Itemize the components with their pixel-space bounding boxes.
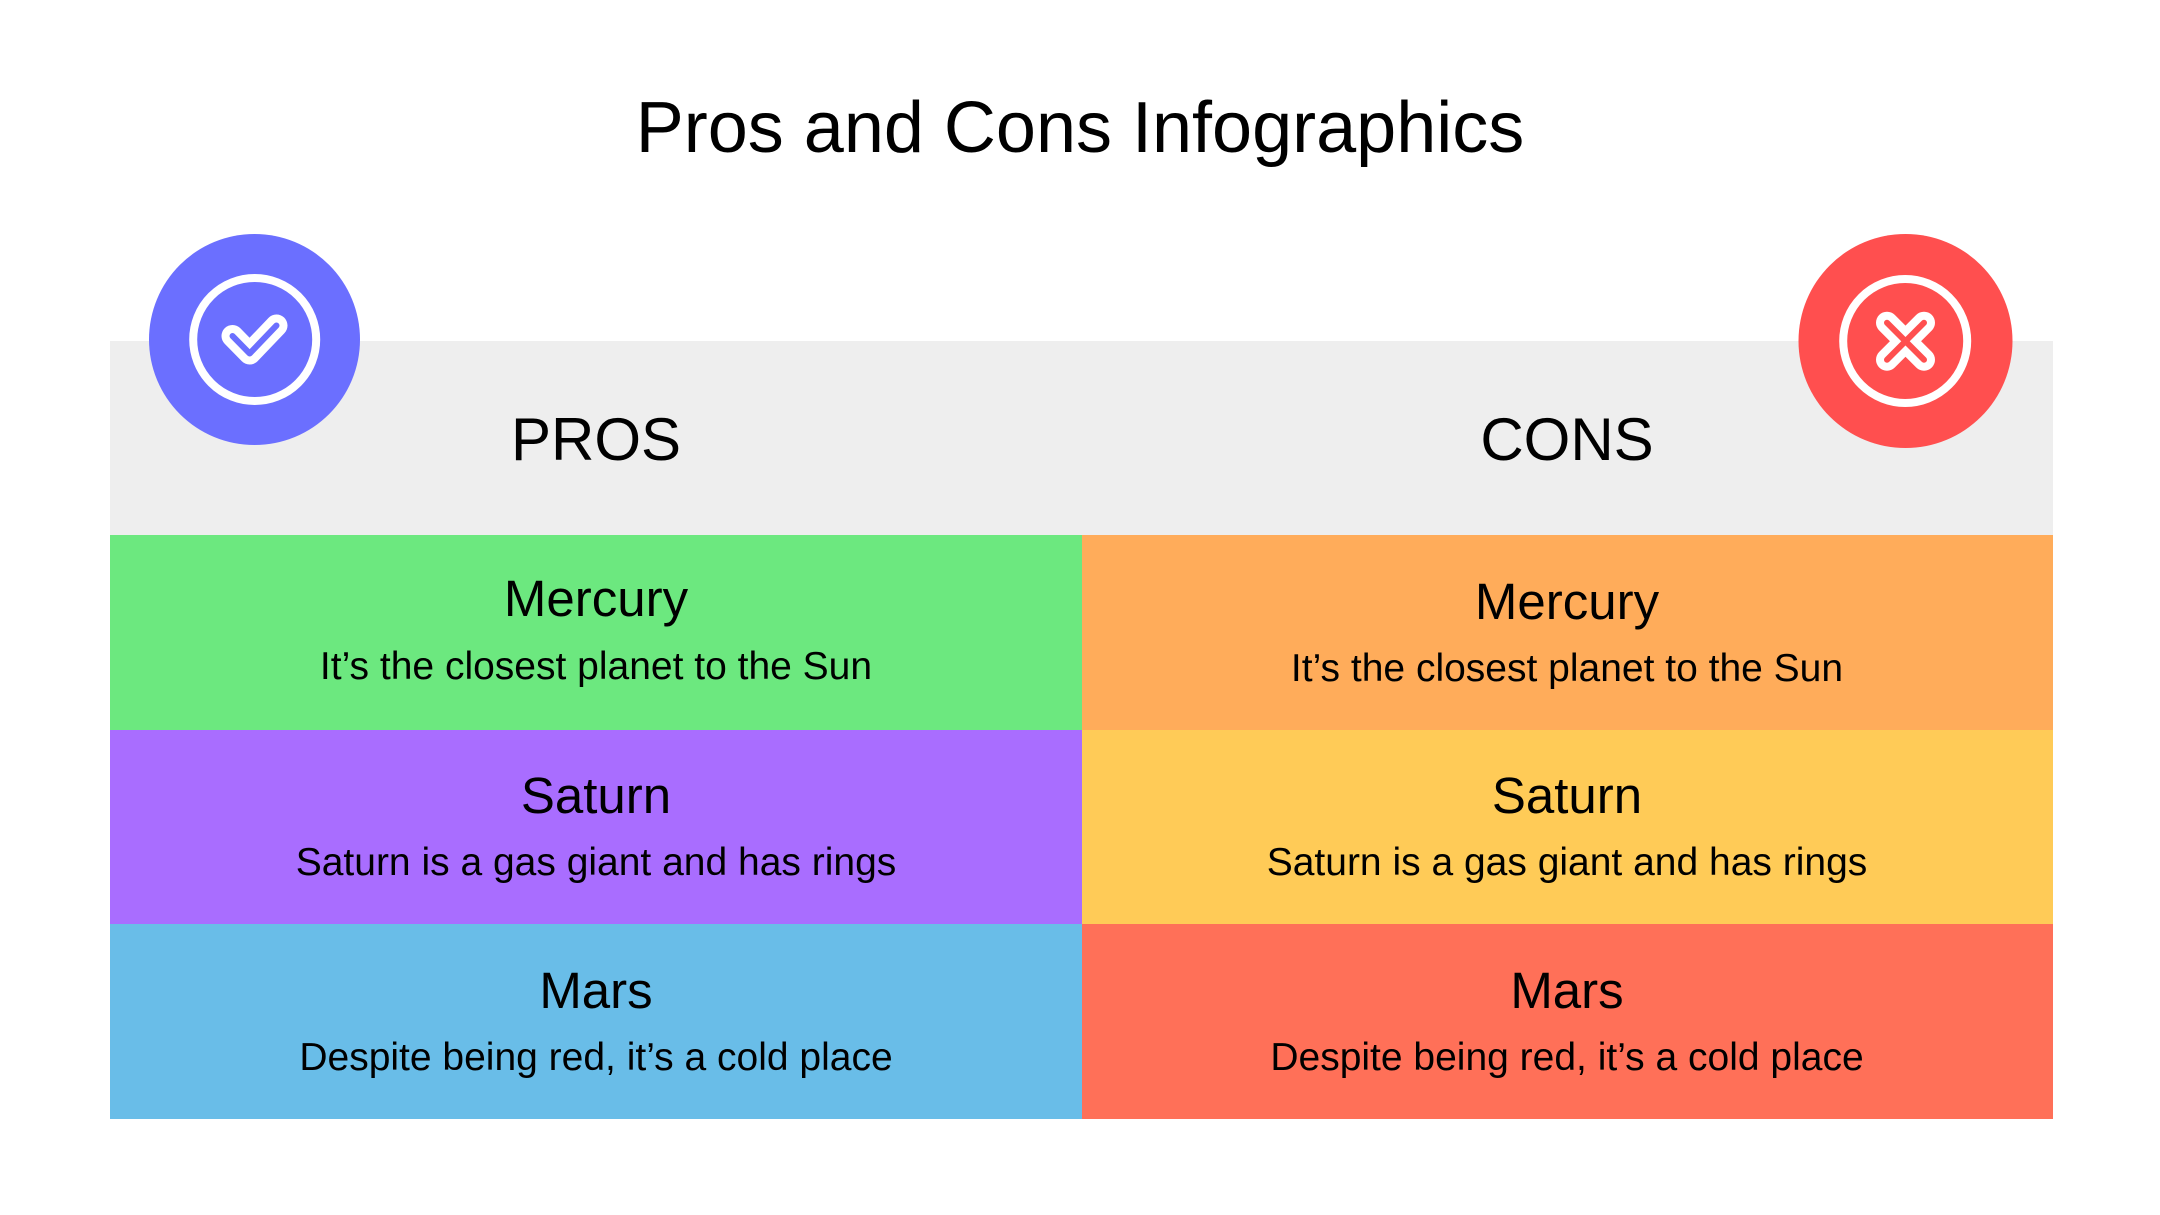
icon: cross badge (1798, 234, 2012, 448)
panel: pros Mars: Despite being red, it’s a cold place (299, 1036, 893, 1079)
panel: header band (110, 341, 2053, 535)
panel: pros Saturn (110, 730, 1082, 924)
panel: pros Mars (110, 924, 1082, 1119)
icon: check badge (149, 234, 360, 445)
panel: cons Saturn (1082, 730, 2053, 924)
panel: cons Mars (1082, 924, 2053, 1119)
panel: cons Mars: Despite being red, it’s a cold place (1270, 1036, 1864, 1079)
title: Pros and Cons Infographics (636, 88, 1524, 168)
heading: pros: PROS (511, 406, 681, 473)
panel: pros Saturn: Saturn (521, 767, 671, 824)
panel: cons Mercury (1082, 535, 2053, 730)
panel: pros Mercury (110, 535, 1082, 730)
panel: cons Saturn: Saturn is a gas giant and has rings (1267, 841, 1867, 884)
heading: cons: CONS (1480, 406, 1654, 473)
panel: cons Mars: Mars (1510, 962, 1624, 1019)
panel: cons Mercury: Mercury (1475, 573, 1660, 630)
panel: pros Mercury: Mercury (504, 570, 689, 627)
panel: pros Mars: Mars (539, 962, 653, 1019)
panel: pros Saturn: Saturn is a gas giant and has rings (296, 841, 896, 884)
panel: cons Saturn: Saturn (1492, 767, 1642, 824)
panel: cons Mercury: It’s the closest planet to the Sun (1291, 647, 1843, 690)
panel: pros Mercury: It’s the closest planet to the Sun (320, 645, 872, 688)
